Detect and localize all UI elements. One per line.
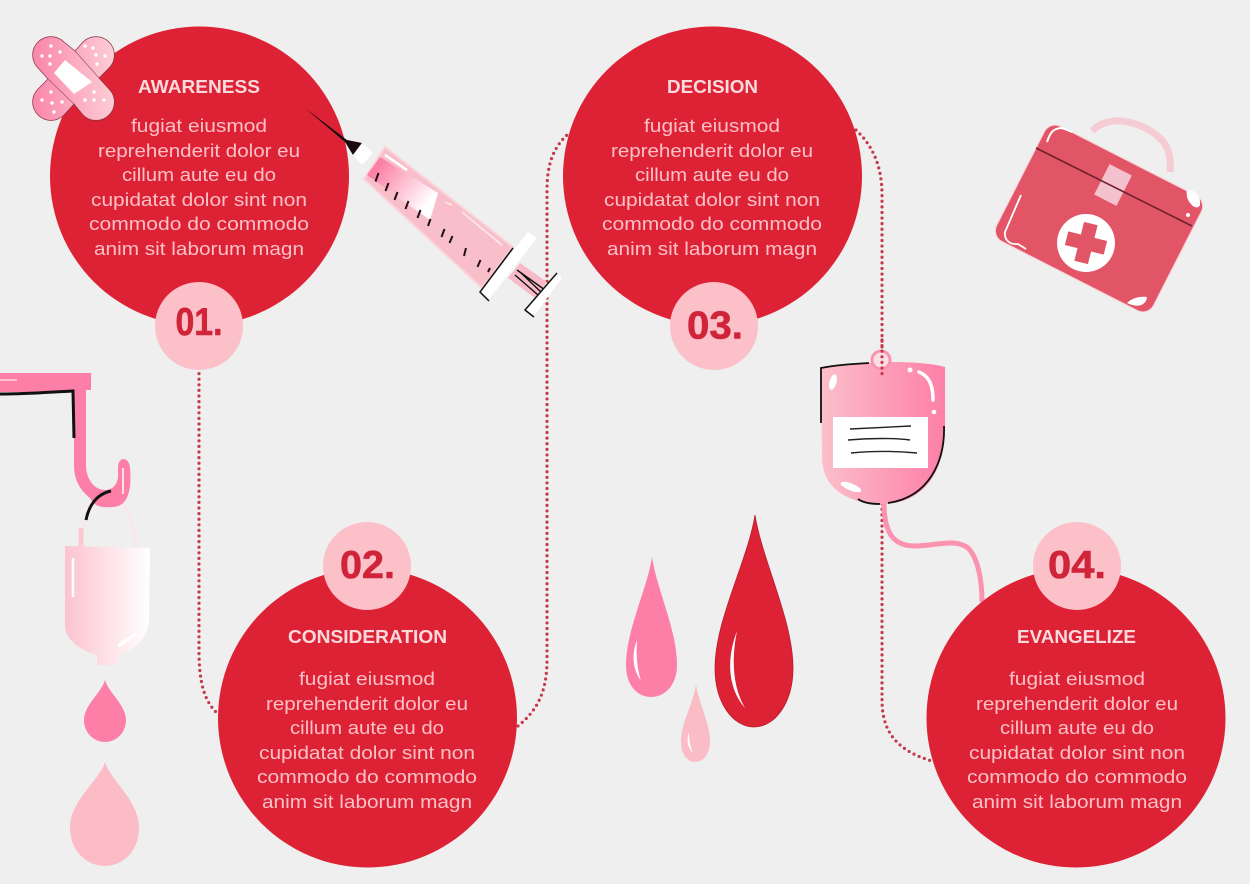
text block 02 (257, 669, 477, 812)
bandage gauze pad (54, 60, 92, 94)
icon: small pink drop (84, 680, 126, 742)
text block 04 (967, 669, 1187, 812)
circle 03 (563, 26, 862, 326)
text block 04: commodo do commodo (967, 767, 1187, 787)
text block 02: reprehenderit dolor eu (266, 694, 468, 714)
text block 01: commodo do commodo (89, 214, 309, 234)
pale bag handle (82, 494, 136, 548)
text block 02: anim sit laborum magn (262, 792, 472, 812)
syringe hub (353, 143, 373, 165)
text block 02: cupidatat dolor sint non (259, 743, 475, 763)
needle (305, 108, 362, 155)
kit handle (1092, 121, 1170, 172)
icon: first aid kit (991, 121, 1207, 316)
bag label (833, 417, 928, 468)
text block 03 (602, 116, 822, 259)
connector: dotted path 03 to 04 (856, 130, 935, 762)
circle 01 (50, 26, 349, 326)
text block 01: cupidatat dolor sint non (91, 190, 307, 210)
text block 04: reprehenderit dolor eu (976, 694, 1178, 714)
cross emblem (1057, 214, 1115, 272)
text block 02: commodo do commodo (257, 767, 477, 787)
text block 01: anim sit laborum magn (94, 239, 304, 259)
syringe flanges (480, 232, 537, 298)
kit latch (1094, 164, 1132, 206)
text block 02: cillum aute eu do (290, 718, 444, 738)
pale bag (65, 546, 150, 665)
text block 03: fugiat eiusmod (644, 116, 780, 136)
icon: iv tube (884, 503, 982, 602)
heading: decision: DECISION (667, 76, 758, 97)
heading: awareness: AWARENESS (138, 76, 260, 97)
syringe plunger (508, 263, 547, 298)
number badge 04 (1033, 522, 1121, 610)
text block 01 (89, 116, 309, 259)
connector overlay: dots through ring (880, 340, 884, 374)
bag highlights (919, 372, 933, 400)
text block 03: reprehenderit dolor eu (611, 141, 813, 161)
number badge 04: 04. (1048, 544, 1106, 587)
syringe barrel (364, 147, 513, 288)
connector: dotted path 01 to 02 (199, 368, 218, 714)
circle 02 (218, 568, 517, 868)
text block 03: cupidatat dolor sint non (604, 190, 820, 210)
bandage dots (40, 44, 107, 114)
icon: pink drop (626, 557, 677, 697)
text block 04: anim sit laborum magn (972, 792, 1182, 812)
text block 04: cupidatat dolor sint non (969, 743, 1185, 763)
icon: pale small drop (681, 684, 710, 762)
number badge 03 (670, 282, 758, 370)
kit strap line (1036, 148, 1192, 226)
text block 01: cillum aute eu do (122, 165, 276, 185)
syringe ticks (376, 173, 490, 272)
text block 03: cillum aute eu do (635, 165, 789, 185)
number badge 02 (323, 522, 411, 610)
icon: bandage (33, 37, 114, 120)
text block 04: fugiat eiusmod (1009, 669, 1145, 689)
text block 01: reprehenderit dolor eu (98, 141, 300, 161)
icon: iv blood bag (821, 351, 945, 504)
text block 01: fugiat eiusmod (131, 116, 267, 136)
number badge 01: 01. (176, 301, 222, 344)
kit highlights (1005, 128, 1200, 306)
panel: step 02 consideration (218, 522, 517, 868)
panel: step 03 decision (563, 26, 862, 370)
number badge 02: 02. (340, 544, 395, 587)
icon: syringe (305, 108, 562, 317)
bag ring (872, 351, 890, 369)
panel: step 01 awareness (50, 26, 349, 370)
connector: dotted path 02 to 03 (518, 135, 567, 726)
text block 03: commodo do commodo (602, 214, 822, 234)
hook arm (0, 373, 130, 507)
text block 03: anim sit laborum magn (607, 239, 817, 259)
text block 02: fugiat eiusmod (299, 669, 435, 689)
circle 04 (926, 568, 1226, 868)
heading: consideration: CONSIDERATION (288, 626, 447, 647)
text block 04: cillum aute eu do (1000, 718, 1154, 738)
icon: red drop (715, 515, 793, 727)
icon: hook with pale bag (0, 373, 150, 665)
icon: large pale drop (70, 762, 139, 866)
panel: step 04 evangelize (926, 522, 1226, 868)
kit body (991, 121, 1207, 316)
number badge 03: 03. (687, 304, 743, 348)
number badge 01 (155, 282, 243, 370)
heading: evangelize: EVANGELIZE (1017, 626, 1136, 647)
